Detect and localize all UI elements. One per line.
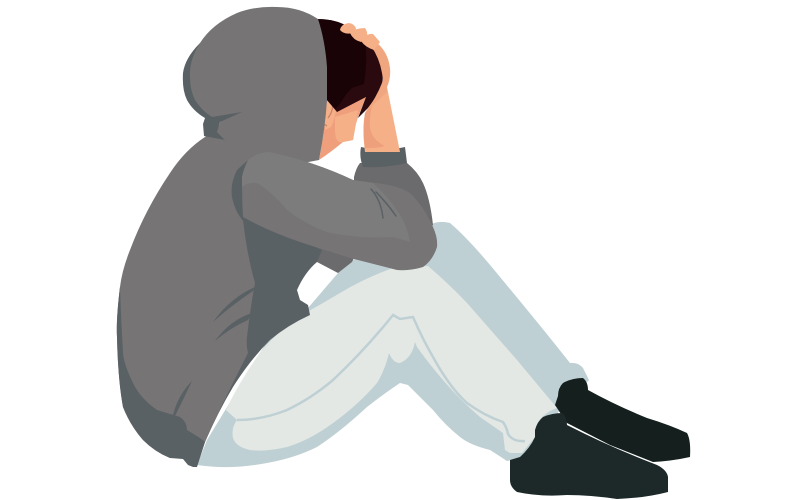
front leg bbox=[226, 266, 557, 453]
hood bbox=[183, 7, 327, 175]
trouser fold lines bbox=[237, 315, 525, 441]
far arm sleeve bbox=[305, 163, 433, 273]
hoodie body bbox=[117, 100, 300, 467]
face and ear bbox=[319, 92, 368, 160]
near arm sleeve bbox=[232, 152, 437, 270]
sleeve highlight bbox=[242, 152, 410, 242]
hood drawstring knot bbox=[183, 43, 242, 140]
sleeve creases bbox=[371, 189, 396, 218]
torso dark shade bbox=[190, 215, 322, 465]
hoodie lower dark band bbox=[117, 287, 205, 467]
back shoe bbox=[555, 378, 690, 462]
hair bbox=[318, 19, 383, 118]
cuff bbox=[360, 147, 407, 167]
back leg bbox=[197, 222, 589, 467]
hoodie folds bbox=[173, 287, 255, 416]
hand and forearm bbox=[340, 23, 400, 152]
fingers bbox=[340, 23, 380, 50]
front shoe bbox=[510, 413, 668, 499]
